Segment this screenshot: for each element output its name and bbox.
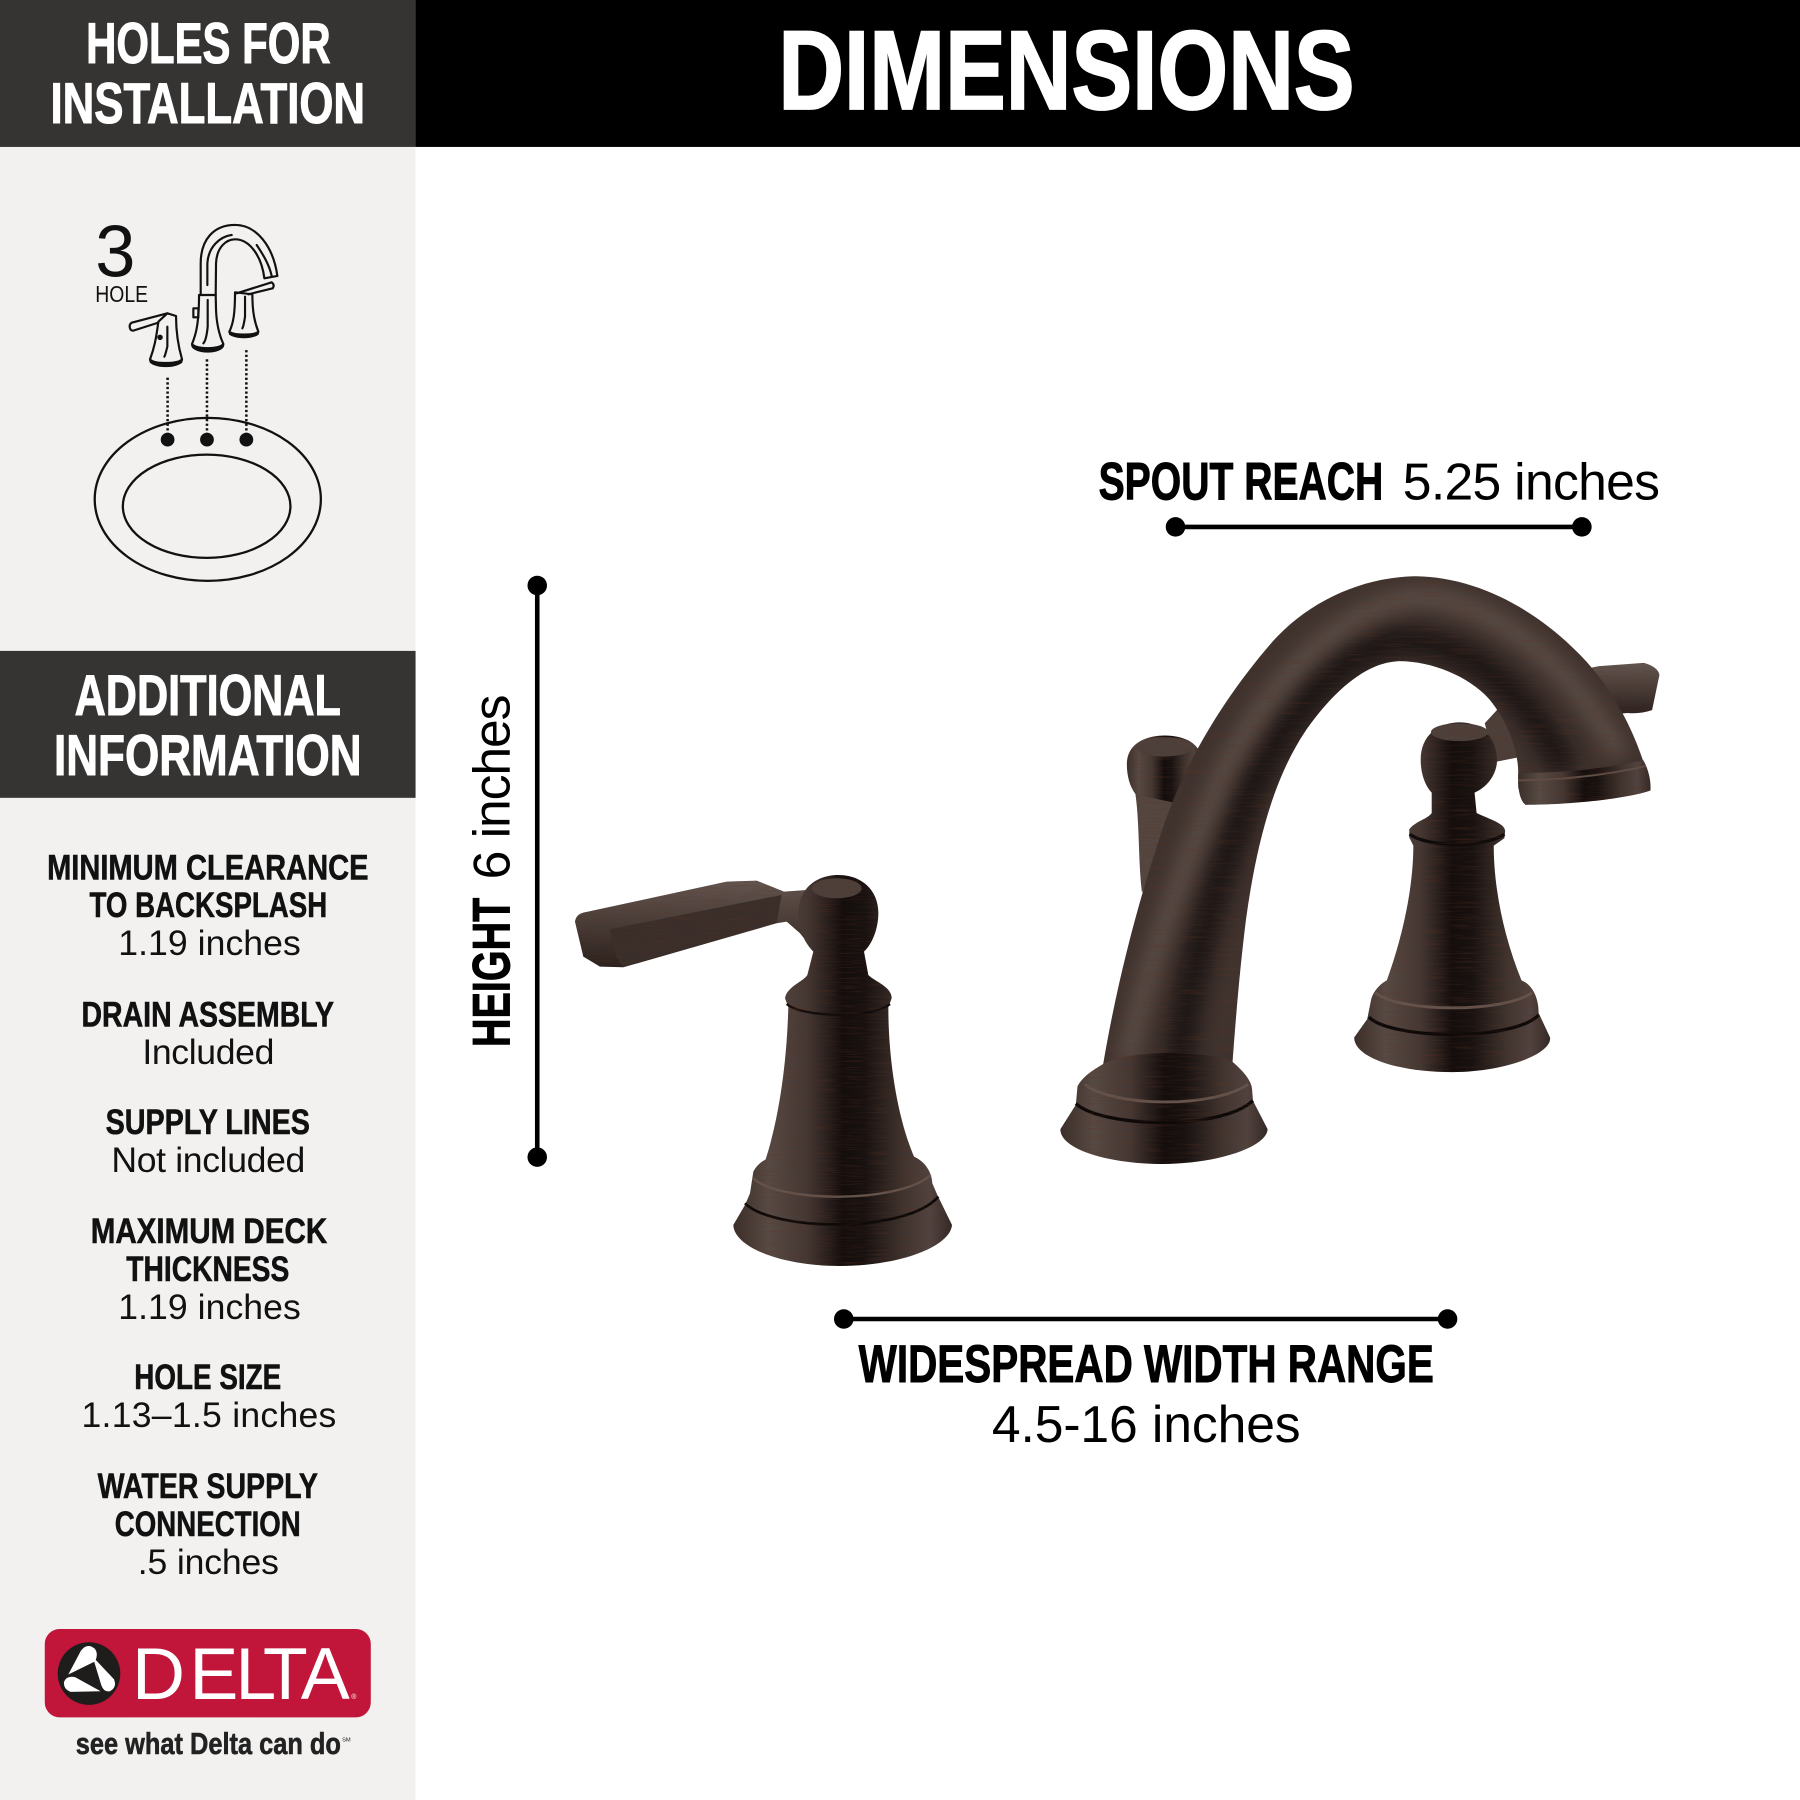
spec: minimum clearance: MINIMUM CLEARANCE (47, 847, 368, 887)
dimension: height: 6 inches (463, 695, 521, 879)
spec: hole size: 1.13–1.5 inches (82, 1395, 336, 1435)
label: 3 hole: 3 (95, 210, 135, 293)
label: 3 hole: HOLE (95, 281, 148, 307)
spec: supply lines (106, 1102, 310, 1180)
icon: three hole faucet and sink (95, 210, 321, 581)
left handle (575, 875, 952, 1266)
right handle drawing (229, 282, 274, 337)
center spout drawing (192, 225, 277, 351)
right handle lever (1485, 663, 1659, 762)
logo: delta: ® (351, 1693, 356, 1701)
dimension: widespread width range: WIDESPREAD WIDTH RANGE (859, 1335, 1434, 1394)
spec: drain assembly (82, 994, 334, 1072)
lever (575, 881, 813, 967)
spout tip (1518, 760, 1651, 805)
handle body (733, 875, 952, 1266)
arrow: spout reach line (1166, 517, 1592, 537)
tagline: SM (342, 1737, 351, 1743)
panel: sidebar (0, 147, 416, 1800)
heading: additional information (0, 651, 416, 798)
dimension: widespread width range: 4.5-16 inches (992, 1395, 1301, 1453)
faucet: product illustration (575, 576, 1659, 1266)
spec: hole size: HOLE SIZE (134, 1357, 281, 1397)
spec: minimum clearance: 1.19 inches (118, 923, 301, 963)
spout body (1103, 576, 1644, 1086)
back lift rod (1127, 735, 1203, 893)
dimension: spout reach: 5.25 inches (1403, 452, 1660, 510)
arrow: width line (834, 1309, 1457, 1329)
spec: supply lines: SUPPLY LINES (106, 1102, 310, 1142)
spec: drain assembly: DRAIN ASSEMBLY (82, 994, 334, 1034)
right handle body (1354, 722, 1550, 1072)
dimension: widespread width range (834, 1309, 1457, 1453)
spec: water supply connection (98, 1466, 318, 1582)
spec: maximum deck thickness: MAXIMUM DECK (91, 1211, 327, 1251)
logo: delta (45, 1629, 371, 1717)
spout shading (1126, 597, 1619, 1066)
heading: additional information: ADDITIONAL (75, 664, 341, 728)
arrow: height line (527, 576, 547, 1167)
heading: additional information: INFORMATION (54, 724, 362, 788)
dimension: height: HEIGHT (463, 898, 522, 1047)
dotted guide lines (168, 350, 246, 434)
logo: delta: DELTA (132, 1632, 350, 1715)
spec: drain assembly: Included (142, 1032, 274, 1072)
spec: water supply connection: CONNECTION (115, 1504, 301, 1544)
title: dimensions (416, 0, 1800, 147)
dimension: height (463, 576, 547, 1167)
left handle drawing (130, 313, 182, 366)
spec: maximum deck thickness: 1.19 inches (118, 1287, 301, 1327)
spec: maximum deck thickness (91, 1211, 327, 1327)
mounting holes (161, 433, 253, 447)
dimension: spout reach: SPOUT REACH (1099, 452, 1383, 511)
heading: holes for installation: HOLES FOR (86, 12, 331, 76)
heading: holes for installation: INSTALLATION (51, 72, 365, 136)
spec: water supply connection: WATER SUPPLY (98, 1466, 318, 1506)
sink outline (95, 418, 321, 581)
spout base (1060, 1053, 1268, 1164)
spec: supply lines: Not included (111, 1140, 305, 1180)
heading: holes for installation (0, 0, 416, 147)
label: 3 hole (95, 210, 148, 307)
spout and right handle (1060, 576, 1659, 1164)
spec: minimum clearance: TO BACKSPLASH (90, 885, 327, 925)
spec: water supply connection: .5 inches (138, 1542, 279, 1582)
spec: hole size (82, 1357, 336, 1435)
spec: minimum clearance (47, 847, 368, 963)
dimension: spout reach (1099, 452, 1660, 537)
title: dimensions: DIMENSIONS (778, 7, 1355, 133)
spec: maximum deck thickness: THICKNESS (126, 1249, 289, 1289)
tagline: see what Delta can do (76, 1726, 341, 1761)
icon: delta emblem (58, 1642, 120, 1705)
small faucet line drawing (130, 225, 277, 366)
